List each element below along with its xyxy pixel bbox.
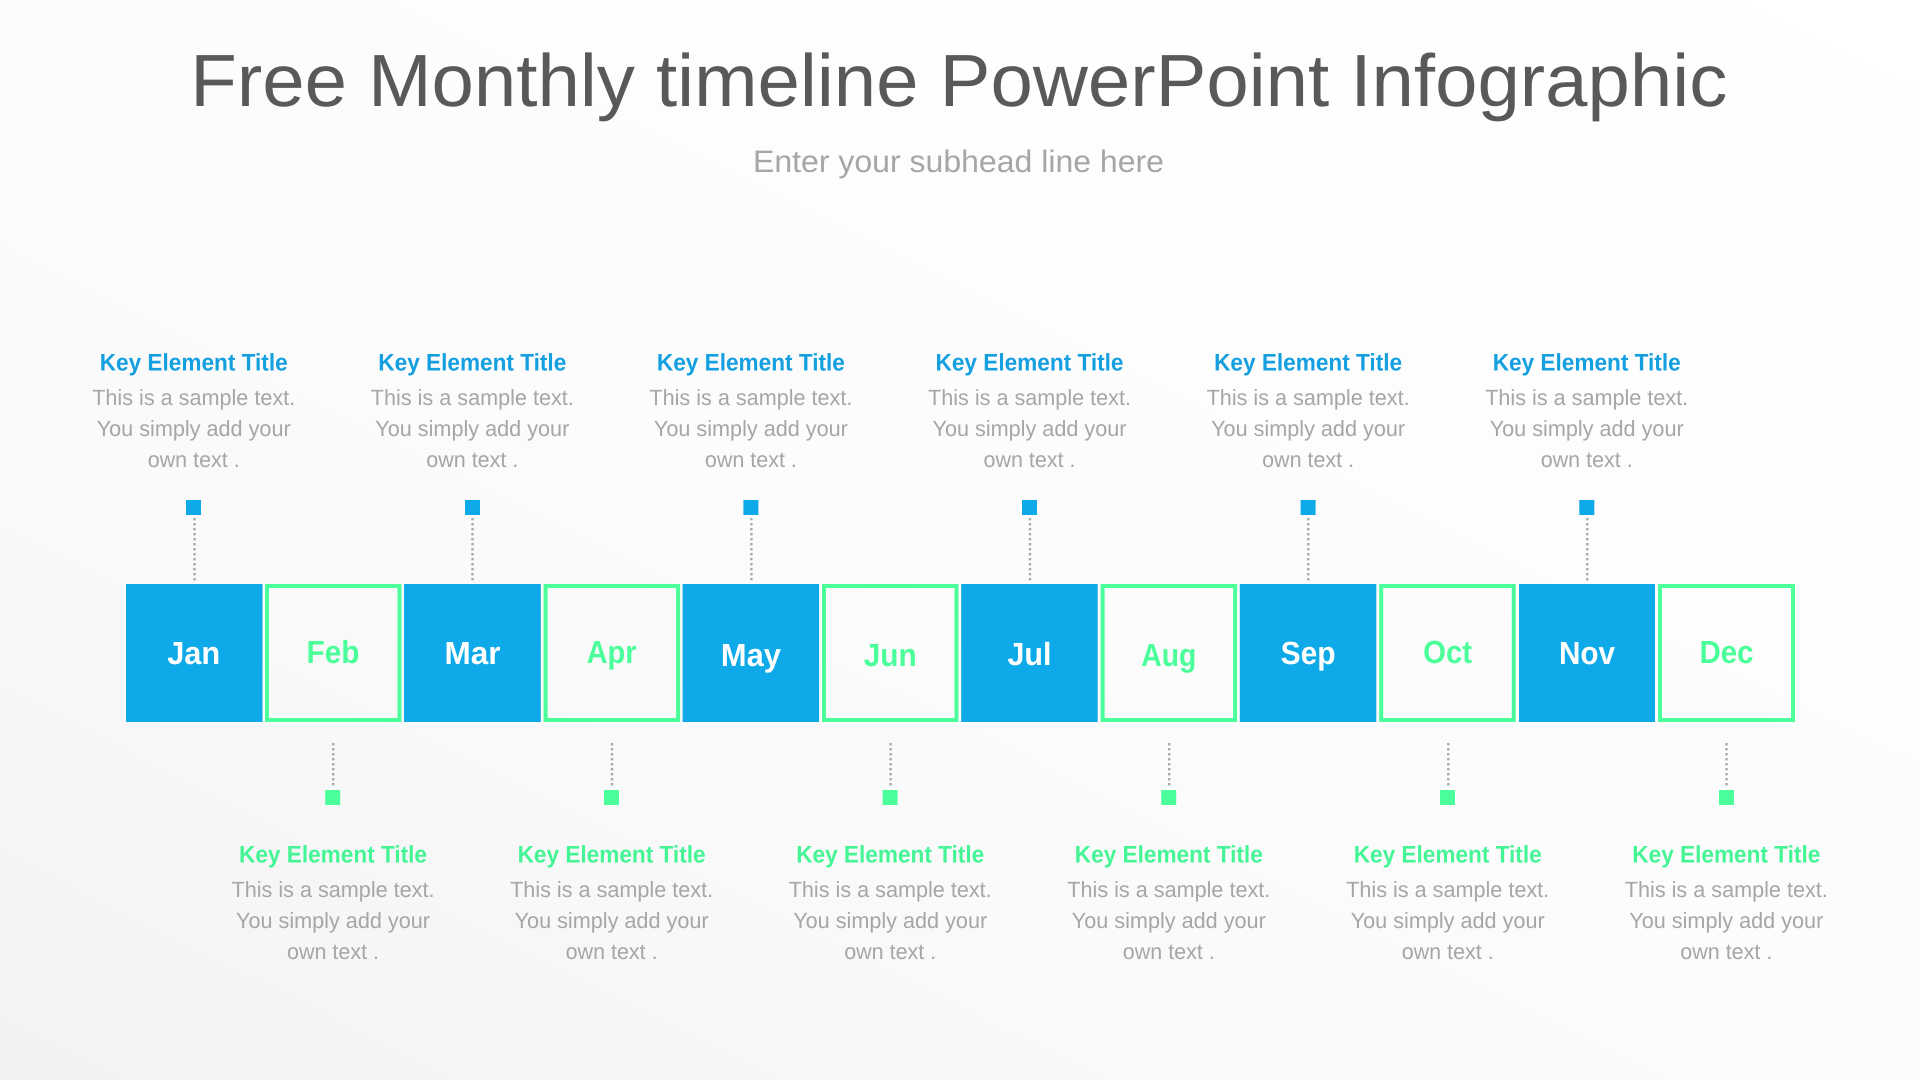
text block: Dec: This is a sample text.	[1625, 877, 1828, 902]
month block: Jul: Jul	[1008, 636, 1052, 672]
text block: Nov: This is a sample text.	[1485, 385, 1688, 410]
text block: Feb: You simply add your	[236, 908, 430, 933]
connector and marker: Aug	[1161, 743, 1176, 805]
text block: Mar	[371, 350, 574, 472]
text block: May	[649, 350, 852, 472]
connector and marker: Oct	[1440, 743, 1455, 805]
connector and marker: Apr	[604, 743, 619, 805]
connector and marker: Dec	[1719, 743, 1734, 805]
text block: Apr	[510, 842, 713, 964]
text block: Sep: This is a sample text.	[1207, 385, 1410, 410]
month block: May: May	[721, 637, 781, 673]
text block: Nov: own text .	[1541, 447, 1633, 472]
month block: Mar: Mar	[444, 635, 500, 671]
text block: Sep: You simply add your	[1211, 416, 1405, 441]
text block: Jun: Key Element Title	[796, 842, 984, 869]
month block: Jan	[126, 584, 262, 722]
text block: Apr: This is a sample text.	[510, 877, 713, 902]
month block: Mar	[404, 584, 541, 722]
title: Free Monthly timeline PowerPoint Infographic	[190, 39, 1727, 122]
text block: Oct: You simply add your	[1351, 908, 1545, 933]
text block: Jun: This is a sample text.	[789, 877, 992, 902]
text block: Jan: Key Element Title	[100, 350, 288, 377]
connector and marker: Nov	[1579, 500, 1594, 582]
month block: Sep	[1240, 584, 1376, 722]
month block: Apr	[546, 586, 678, 720]
month block: Oct: Oct	[1423, 634, 1472, 670]
text block: Apr: own text .	[566, 939, 658, 964]
text block: Aug: You simply add your	[1072, 908, 1266, 933]
text block: May: Key Element Title	[657, 350, 845, 377]
text block: Apr: Key Element Title	[518, 842, 706, 869]
connector and marker: Mar	[465, 500, 480, 582]
text block: Jun	[789, 842, 992, 964]
text block: Nov: You simply add your	[1490, 416, 1684, 441]
text block: Oct: Key Element Title	[1354, 842, 1542, 869]
text block: Aug: This is a sample text.	[1067, 877, 1270, 902]
text block: Oct	[1346, 842, 1549, 964]
month block: Dec	[1660, 586, 1793, 720]
month block: Jun: Jun	[864, 637, 917, 673]
month block: Nov: Nov	[1559, 635, 1615, 671]
month block: May	[683, 584, 819, 722]
connector and marker: Jun	[883, 743, 898, 805]
text block: Mar: This is a sample text.	[371, 385, 574, 410]
text block: Nov: Key Element Title	[1493, 350, 1681, 377]
month block: Aug: Aug	[1141, 637, 1196, 673]
text block: Jan: You simply add your	[97, 416, 291, 441]
text block: Aug	[1067, 842, 1270, 964]
text block: Jul: This is a sample text.	[928, 385, 1131, 410]
month block: Nov	[1519, 584, 1655, 722]
text block: Sep: own text .	[1262, 447, 1354, 472]
connector and marker: Jul	[1022, 500, 1037, 582]
connector and marker: Sep	[1301, 500, 1316, 582]
text block: Sep	[1207, 350, 1410, 472]
month block: Feb: Feb	[306, 634, 360, 670]
subhead: Enter your subhead line here	[753, 144, 1164, 179]
text block: Dec: Key Element Title	[1632, 842, 1820, 869]
text block: Oct: own text .	[1402, 939, 1494, 964]
text block: Mar: You simply add your	[375, 416, 569, 441]
text block: Feb: Key Element Title	[239, 842, 427, 869]
month block: Jun	[824, 586, 956, 720]
text block: Mar: own text .	[426, 447, 518, 472]
month block: Sep: Sep	[1281, 635, 1336, 671]
text block: Sep: Key Element Title	[1214, 350, 1402, 377]
text block: Jul	[928, 350, 1131, 472]
month block: Dec: Dec	[1700, 634, 1754, 670]
text block: Dec: own text .	[1680, 939, 1772, 964]
text block: Feb	[232, 842, 434, 964]
month block: Oct	[1381, 586, 1514, 720]
text block: Apr: You simply add your	[515, 908, 709, 933]
connector and marker: Feb	[325, 743, 340, 805]
text block: Jan	[92, 350, 295, 472]
month block: Apr: Apr	[587, 634, 637, 670]
text block: Feb: This is a sample text.	[232, 877, 434, 902]
text block: Jan: This is a sample text.	[92, 385, 295, 410]
text block: Jun: You simply add your	[793, 908, 987, 933]
text block: Jul: You simply add your	[932, 416, 1126, 441]
month block: Feb	[267, 586, 400, 720]
connector and marker: Jan	[186, 500, 201, 582]
text block: Mar: Key Element Title	[378, 350, 566, 377]
text block: Feb: own text .	[287, 939, 379, 964]
text block: Nov	[1485, 350, 1688, 472]
text block: Dec	[1625, 842, 1828, 964]
text block: Dec: You simply add your	[1629, 908, 1823, 933]
month block: Jul	[961, 584, 1098, 722]
text block: May: This is a sample text.	[649, 385, 852, 410]
text block: Jun: own text .	[844, 939, 936, 964]
text block: Jul: Key Element Title	[936, 350, 1124, 377]
month block: Aug	[1103, 586, 1235, 720]
text block: Aug: own text .	[1123, 939, 1215, 964]
text block: May: You simply add your	[654, 416, 848, 441]
month block: Jan: Jan	[167, 635, 220, 671]
text block: May: own text .	[705, 447, 797, 472]
text block: Jan: own text .	[148, 447, 240, 472]
text block: Jul: own text .	[984, 447, 1076, 472]
connector and marker: May	[743, 500, 758, 582]
text block: Oct: This is a sample text.	[1346, 877, 1549, 902]
text block: Aug: Key Element Title	[1075, 842, 1263, 869]
